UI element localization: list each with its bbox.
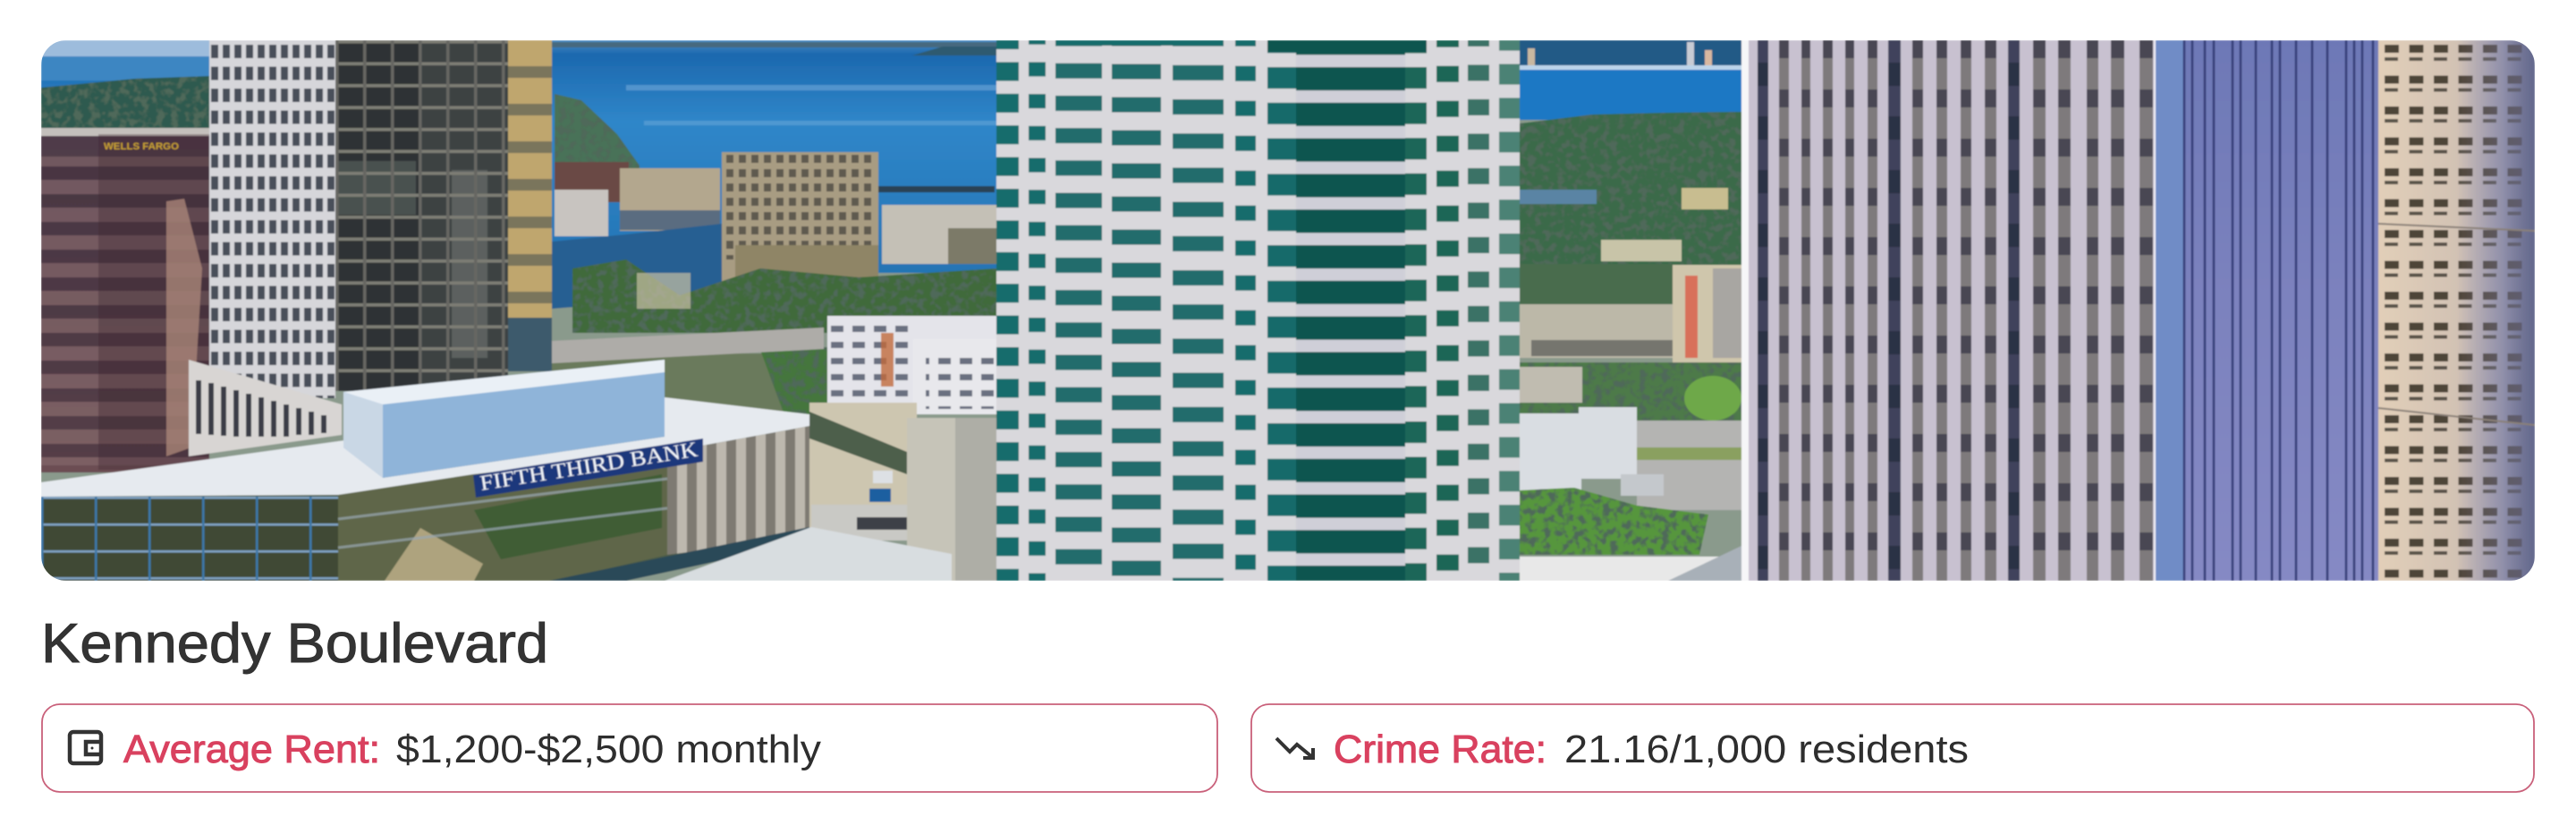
photo: dark reflective building with sign: [41, 128, 209, 472]
photo: white and dark-glass office tower: [209, 40, 552, 398]
average rent value: $1,200-$2,500 monthly: [396, 728, 821, 771]
photo: blue reflective tower face: [2156, 40, 2378, 581]
photo: elevated roadway: [552, 328, 824, 363]
card: crime rate: [1251, 704, 2534, 792]
photo: lower bank building with glass facade: [41, 397, 952, 581]
photo: canal, parking deck and concrete block: [809, 403, 996, 581]
card: average rent: [42, 704, 1217, 792]
photo: beige tower with small windows: [2378, 40, 2535, 581]
icon: trending down arrow: [1276, 738, 1313, 758]
panel: aerial photo of downtown towers: [41, 40, 2535, 581]
photo: low-rise buildings and hotel along the water: [552, 94, 996, 309]
photo: white apartment blocks: [827, 316, 996, 414]
icon: wallet: [70, 732, 101, 763]
photo: central white tower with teal windows: [996, 40, 1520, 581]
photo: Fifth Third Bank sign: FIFTH THIRD BANK: [479, 438, 700, 496]
photo: low annex with arched windows: [189, 360, 342, 456]
title: Kennedy Boulevard: [41, 613, 548, 675]
photo: dark reflective building with sign: WELLS FARGO: [104, 141, 179, 152]
crime rate label: Crime Rate:: [1334, 728, 1546, 771]
photo: city and bay view between towers: [1520, 40, 1741, 581]
average rent label: Average Rent:: [123, 728, 380, 771]
photo: trees by the waterfront: [551, 260, 998, 415]
photo: striped grey tower: [1741, 40, 2156, 581]
photo: rooftop penthouse box: [343, 360, 665, 478]
photo: far hillside: [41, 76, 209, 134]
crime rate value: 21.16/1,000 residents: [1564, 728, 1969, 771]
photo: bay water and sky: [41, 40, 998, 273]
